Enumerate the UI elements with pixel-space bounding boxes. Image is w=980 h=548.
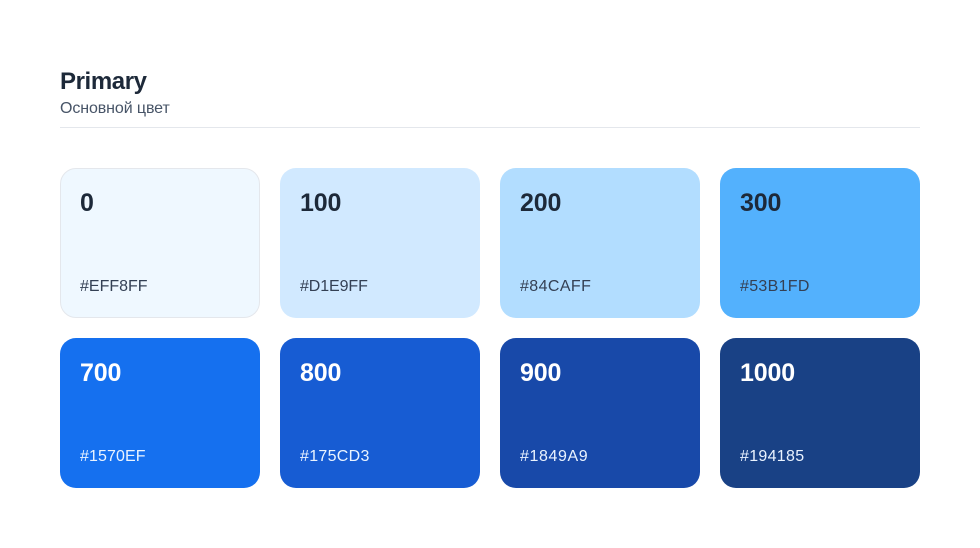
swatch: 700	[60, 338, 260, 488]
swatch: 100: 100	[300, 189, 341, 217]
swatch: 900	[500, 338, 700, 488]
swatch: 800: 800	[300, 359, 341, 387]
swatch: 0	[60, 168, 260, 318]
swatch: 700: 700	[80, 359, 121, 387]
swatch: 900: #1849A9	[520, 448, 588, 465]
subtitle: Основной цвет	[60, 100, 170, 117]
swatch: 900: 900	[520, 359, 561, 387]
swatch: 0: 0	[80, 189, 94, 217]
swatch: 300	[720, 168, 920, 318]
title: Primary	[60, 68, 147, 95]
swatch: 100	[280, 168, 480, 318]
swatch: 300: #53B1FD	[740, 278, 810, 295]
swatch: 100: #D1E9FF	[300, 278, 368, 295]
swatch: 1000: 1000	[740, 359, 795, 387]
swatch: 1000	[720, 338, 920, 488]
swatch: 300: 300	[740, 189, 781, 217]
swatch: 200: 200	[520, 189, 561, 217]
swatch: 700: #1570EF	[80, 448, 146, 465]
swatch: 800	[280, 338, 480, 488]
swatch: 200	[500, 168, 700, 318]
swatch: 0: #EFF8FF	[80, 278, 148, 295]
swatch: 200: #84CAFF	[520, 278, 591, 295]
swatch: 1000: #194185	[740, 448, 804, 465]
swatch: 800: #175CD3	[300, 448, 370, 465]
